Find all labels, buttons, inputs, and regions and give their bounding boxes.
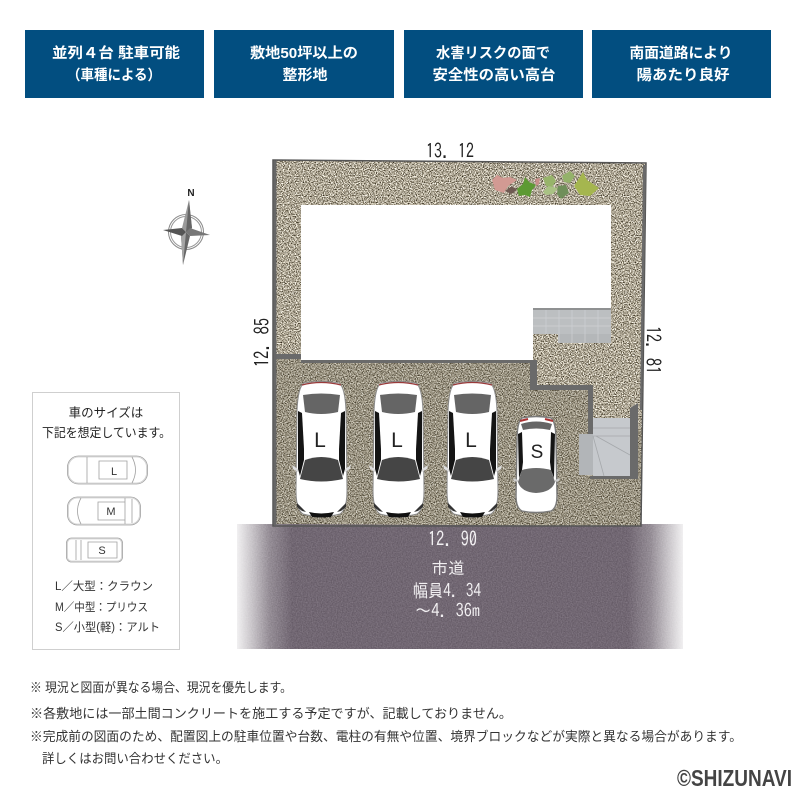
legend heading: 車のサイズは	[69, 405, 143, 420]
building footprint	[301, 205, 611, 360]
footnotes: 詳しくはお問い合わせください。	[42, 751, 228, 766]
car: L 1	[292, 382, 351, 518]
banner: south road: 南面道路により	[630, 45, 732, 62]
banner: land shape: 整形地	[282, 67, 328, 84]
legend car L	[68, 456, 148, 484]
banner: land shape	[214, 30, 394, 98]
boundary and retaining walls	[276, 354, 638, 479]
dimension: left: 12. 85	[252, 318, 272, 367]
banner: land shape: 敷地50坪以上の	[250, 44, 358, 62]
site plot	[270, 158, 650, 528]
road label: 幅員4. 34	[413, 581, 481, 600]
legend car L: L	[111, 466, 117, 478]
banner: parking: 並列４台 駐車可能	[52, 44, 181, 62]
banner: south road: 陽あたり良好	[636, 66, 730, 84]
footnotes	[30, 680, 742, 766]
entrance tiles	[533, 308, 611, 343]
legend car S	[66, 538, 122, 562]
legend car M: M	[106, 506, 116, 518]
legend car M	[68, 497, 140, 525]
parking area shading	[273, 358, 641, 526]
dimension: bottom: 12. 90	[428, 529, 477, 549]
entrance stairs	[579, 418, 630, 476]
road label: ～4. 36m	[415, 602, 480, 620]
banner: flood safety: 安全性の高い高台	[432, 66, 556, 84]
road label: 市道	[432, 559, 464, 576]
legend text: L／大型：クラウン	[55, 579, 153, 593]
plants	[492, 171, 599, 199]
footnotes: ※ 現況と図面が異なる場合、現況を優先します。	[30, 680, 292, 695]
car: L 1: L	[314, 429, 326, 452]
road	[236, 523, 684, 650]
legend text	[55, 579, 160, 634]
car: L 2: L	[391, 429, 403, 452]
icon: compass: N	[187, 188, 195, 199]
banner: flood safety: 水害リスクの面で	[436, 45, 550, 62]
car: L 3	[443, 382, 502, 518]
legend heading	[42, 405, 171, 440]
banner: parking: （車種による）	[67, 67, 161, 84]
footnotes: ※完成前の図面のため、配置図上の駐車位置や台数、電柱の有無や位置、境界ブロックなどが実際と異なる場合があります。	[30, 729, 742, 744]
banner: flood safety	[404, 30, 583, 98]
panel: car sizes	[32, 392, 180, 650]
dimension: right: 12. 81	[643, 326, 663, 374]
footnotes: ※各敷地には一部土間コンクリートを施工する予定ですが、記載しておりません。	[30, 706, 512, 721]
road label	[413, 559, 481, 620]
banner: south road	[592, 30, 771, 98]
car: L 3: L	[465, 429, 477, 452]
icon: compass	[163, 188, 210, 265]
legend text: M／中型：プリウス	[55, 600, 148, 614]
car: L 2	[369, 382, 428, 518]
car: S: S	[531, 442, 543, 463]
car: S	[513, 416, 560, 512]
banner: parking	[25, 30, 204, 98]
dimension: top: 13. 12	[426, 141, 474, 161]
legend heading: 下記を想定しています。	[42, 425, 171, 440]
legend car S: S	[98, 545, 106, 557]
legend text: S／小型(軽)：アルト	[55, 620, 160, 634]
